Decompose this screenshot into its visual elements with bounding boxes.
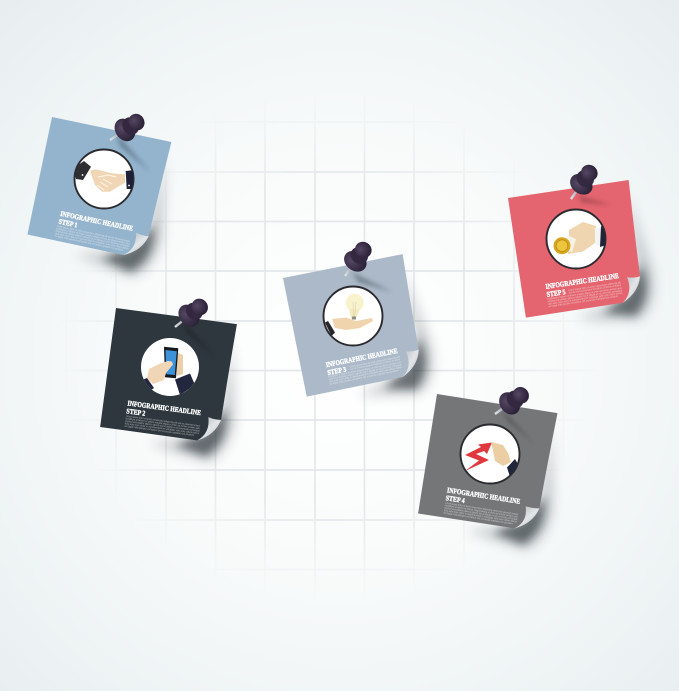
note 3 circle — [324, 286, 382, 346]
note 2 shadow — [147, 327, 245, 464]
note 3 text: sed do eiusmod tempor incididunt ut labore et dolore — [350, 358, 401, 371]
note 2 text: INFOGRAPHIC HEADLINE — [127, 399, 202, 417]
icon: light bulb on hand — [325, 294, 373, 336]
icon: red arrow and hand — [465, 442, 520, 477]
note 5 pin shadow — [578, 195, 612, 205]
note 5 text: duis aute irure dolor in reprehenderit in voluptate velit esse cillum dolore — [548, 292, 623, 306]
note 2 push pin — [167, 293, 213, 336]
note 4 pin shadow — [502, 410, 535, 445]
note 2 circle — [141, 338, 199, 396]
note 1 push pin — [103, 108, 150, 150]
note 2 text: Lorem ipsum dolor sit amet consectetur adipiscing elit sed do eiusmod tempor — [126, 415, 200, 428]
note 5 text: nostrud exercitation ullamco laboris nisi ut aliquip ex ea commodo consequat — [548, 289, 622, 303]
note 3: grey-blue bulb — [283, 237, 440, 405]
note 3 text: eu fugiat nulla pariatur excepteur sint occaecat cupidatat non proident — [329, 369, 399, 386]
note 2: dark phone — [100, 293, 245, 464]
note 2 text — [124, 399, 203, 438]
note 1: blue handshake — [27, 108, 179, 281]
note 1 paper — [27, 117, 171, 260]
note 4 circle — [460, 424, 520, 484]
note 4 shadow — [464, 414, 565, 553]
note 2 text: STEP 2 — [126, 407, 146, 418]
note 4 text — [443, 486, 521, 526]
note 1 text: Lorem ipsum dolor sit amet consectetur adipiscing elit sed do eiusmod tempor — [56, 225, 131, 243]
note 3 text: Lorem ipsum dolor sit amet consectetur adipiscing elit — [349, 356, 400, 369]
note 2 text: eu fugiat nulla pariatur excepteur sint occaecat cupidatat non proident — [124, 425, 194, 437]
note 3 text — [325, 347, 403, 386]
note 3 text: incididunt ut labore et dolore magna aliqua ut enim ad minim veniam quis — [328, 361, 402, 379]
note 2 text: duis aute irure dolor in reprehenderit in voluptate velit esse cillum dolore — [125, 422, 200, 435]
icon: hand on phone — [142, 347, 195, 395]
note 1 text: incididunt ut labore et dolore magna aliqua ut enim ad minim veniam quis — [56, 227, 131, 246]
note 1 text: eu fugiat nulla pariatur excepteur sint occaecat cupidatat non proident — [54, 235, 124, 252]
note 4 text: incididunt ut labore et dolore magna aliqua ut enim ad minim veniam quis — [444, 504, 519, 519]
note 5 paper — [508, 180, 647, 318]
note 3 shadow — [334, 264, 440, 405]
note 1 shadow — [72, 139, 179, 281]
note 2 pin shadow — [182, 322, 216, 358]
note 1 text — [54, 210, 134, 253]
note 5 text: sed do eiusmod tempor incididunt ut labore et dolore — [568, 284, 622, 295]
note 4 text: duis aute irure dolor in reprehenderit in voluptate velit esse cillum dolore — [444, 509, 518, 524]
note 5 shadow — [559, 190, 659, 329]
note 1 text: STEP 1 — [58, 218, 78, 229]
note 3 text: STEP 3 — [327, 365, 347, 377]
icon: handshake — [74, 161, 135, 192]
note 5 text: INFOGRAPHIC HEADLINE — [545, 272, 619, 291]
note 4 text: eu fugiat nulla pariatur excepteur sint occaecat cupidatat non proident — [443, 511, 513, 525]
icon: hand holding coin — [554, 222, 607, 254]
note 5 text: incididunt ut labore et dolore magna aliqua ut enim ad minim veniam quis — [547, 287, 622, 301]
note 4 text: INFOGRAPHIC HEADLINE — [446, 486, 521, 506]
note 1 text: duis aute irure dolor in reprehenderit in voluptate velit esse cillum dolore — [55, 232, 129, 251]
note 1 circle — [74, 150, 135, 208]
note 4 text: STEP 4 — [445, 494, 466, 505]
note 1 text: nostrud exercitation ullamco laboris nisi ut aliquip ex ea commodo consequat — [55, 230, 130, 248]
note 5 text: eu fugiat nulla pariatur excepteur sint occaecat cupidatat non proident — [548, 295, 618, 308]
note 3 text: nostrud exercitation ullamco laboris nisi ut aliquip ex ea commodo consequat — [328, 363, 402, 381]
note 5 text: STEP 5 — [546, 288, 566, 299]
note 5 circle — [546, 210, 607, 268]
note 4 text: Lorem ipsum dolor sit amet consectetur adipiscing elit sed do eiusmod tempor — [445, 502, 518, 516]
note 3 push pin — [335, 237, 378, 283]
note 4 push pin — [488, 381, 534, 424]
note 2 text: nostrud exercitation ullamco laboris nisi ut aliquip ex ea commodo consequat — [125, 420, 200, 433]
note 2 text: incididunt ut labore et dolore magna aliqua ut enim ad minim veniam quis — [125, 417, 201, 430]
note 3 text: INFOGRAPHIC HEADLINE — [325, 347, 398, 369]
background grid — [102, 128, 560, 566]
note 4 paper — [418, 394, 557, 533]
note 3 text: duis aute irure dolor in reprehenderit in voluptate velit esse cillum dolore — [329, 366, 403, 383]
note 2 paper — [100, 308, 237, 444]
note 5: red coin — [508, 160, 659, 329]
note 5 text: Lorem ipsum dolor sit amet consectetur adipiscing elit — [568, 281, 621, 292]
note 4 text: nostrud exercitation ullamco laboris nisi ut aliquip ex ea commodo consequat — [444, 507, 518, 521]
note 3 pin shadow — [352, 272, 392, 292]
note 3 paper — [283, 254, 426, 397]
note 5 text — [545, 272, 624, 308]
note 4: grey arrow — [418, 381, 565, 553]
note 5 push pin — [561, 160, 604, 206]
note 1 text: INFOGRAPHIC HEADLINE — [60, 210, 134, 233]
note 1 pin shadow — [116, 133, 150, 172]
